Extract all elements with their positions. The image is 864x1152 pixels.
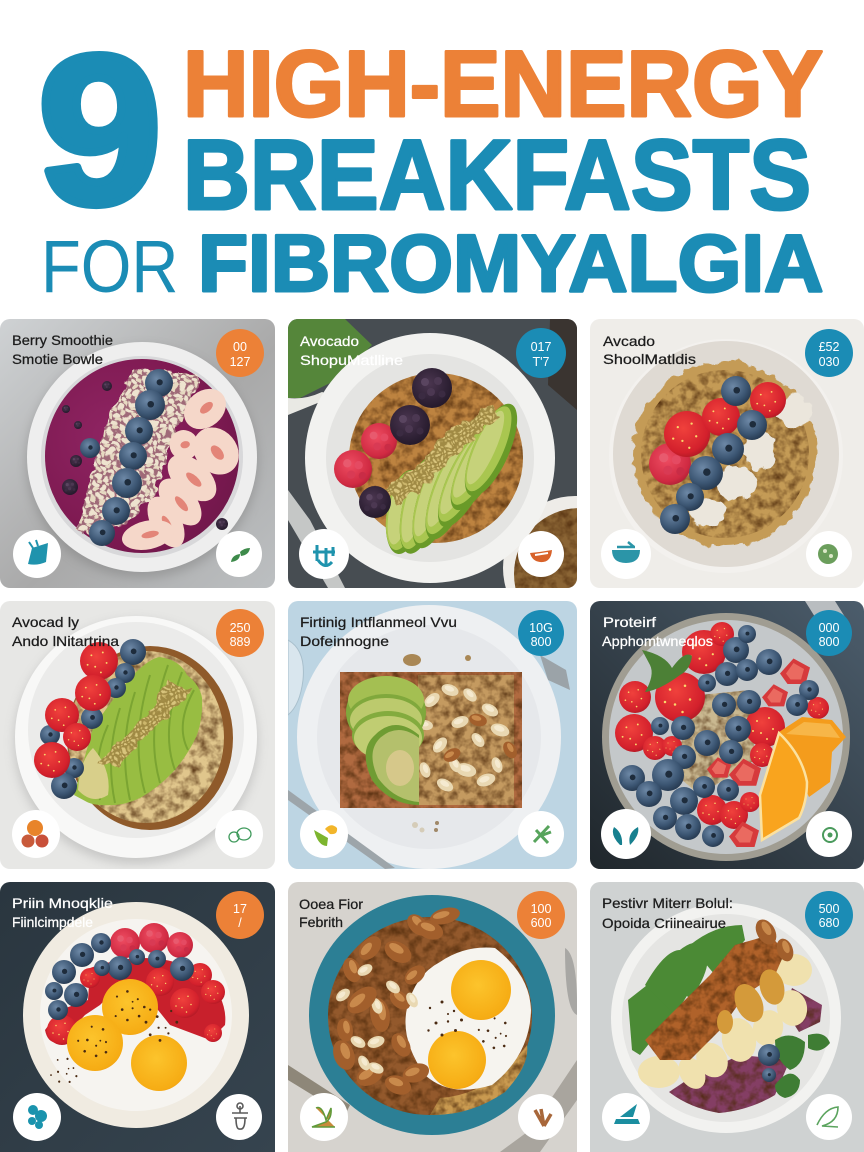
heading: ShopuMatlline [300,352,403,368]
badge: 680 [819,916,839,930]
badge: 10G [529,621,553,635]
badge: 030 [819,355,839,369]
icon: left [13,1093,61,1141]
badge: 000 [819,621,839,635]
panel: egg and berry bowl [0,882,275,1152]
badge: 800 [531,635,551,649]
heading: Berry Smoothie [12,332,113,348]
title line: breakfasts: BREAKFASTS [183,120,811,231]
badge: £52 [819,340,839,354]
icon: right [806,531,852,577]
icon: right [518,811,564,857]
badge: 889 [230,635,250,649]
icon: left [602,1093,650,1141]
panel: protein fruit bowl [590,601,864,869]
icon: right [806,1094,852,1140]
heading [12,616,120,646]
badge [806,610,852,656]
panel: avocado toast [288,319,577,588]
icon: right [215,810,263,858]
heading: Priin Mnoqklie [12,895,113,911]
panel: oatmeal berries [590,319,864,588]
heading: Febrith [299,914,343,930]
badge: 500 [819,902,839,916]
photo: fruit bowl [602,601,850,861]
number 9: 9 [38,12,162,249]
icon: right [518,531,564,577]
heading: Dofeinnogne [300,633,389,649]
badge [216,609,264,657]
badge: 250 [230,621,250,635]
badge: 17 [233,902,247,916]
icon: left [300,1093,348,1141]
heading: Avocad ly [12,614,79,630]
badge: 00 [233,340,247,354]
photo: nuts and eggs bowl [288,895,577,1152]
badge: 800 [819,635,839,649]
panel: pesto power bowl [590,882,864,1152]
badge [216,891,264,939]
heading: ShoolMatldis [603,351,696,367]
badge: 017 [531,340,551,354]
heading: Ooea Fior [299,896,363,912]
badge [805,891,853,939]
badge: 100 [531,902,551,916]
icon: left [12,810,60,858]
title [38,12,823,309]
panel: berry smoothie bowl [0,319,275,588]
heading [299,896,363,930]
heading [12,334,112,364]
title line: high-energy: HIGH-ENERGY [183,31,823,136]
panel: nuts and eggs bowl [288,882,577,1152]
badge: 600 [531,916,551,930]
photo: egg bowl [23,902,249,1128]
heading: Ando lNitartrina [12,633,119,649]
icon: right [518,1094,564,1140]
badge [517,891,565,939]
icon: right [216,531,262,577]
heading: Fiinlcimpdele [12,914,93,930]
nuts [329,905,462,1098]
icon: left [601,529,651,579]
badge: / [238,916,242,930]
heading: Avcado [603,333,655,349]
photo: avocado oat bowl [14,616,258,864]
icon: left [299,529,349,579]
heading: Pestivr Miterr Bolul: [602,895,733,911]
badge [516,328,566,378]
heading [602,336,696,364]
badge [216,329,264,377]
avocado fan [74,657,202,805]
icon: right [216,1094,262,1140]
icon: left [601,809,651,859]
photo: oatmeal bowl [609,339,843,573]
icon: right [806,811,852,857]
heading: Firtinig Intflanmeol Vvu [300,614,457,630]
photo: spinach granola bowl [611,903,841,1133]
icon: left [300,810,348,858]
badge [518,610,564,656]
badge [805,329,853,377]
heading [12,895,113,930]
title word: fibromyalgia: FIBROMYALGIA [198,218,823,309]
heading [300,333,403,368]
photo: toast plate [288,605,570,869]
photo: avocado toast plate [288,319,577,588]
photo: smoothie bowl [26,342,258,578]
panel: anti-inflammatory toast [288,601,577,869]
icon: left [13,530,61,578]
heading: Avocado [300,333,359,349]
heading: Opoida Criineairue [602,915,726,931]
heading [602,614,713,649]
heading: Smotie Bowle [12,351,103,367]
badge: T'7 [533,355,550,369]
heading: Proteirf [603,614,656,630]
badge: 127 [230,355,250,369]
title word: for: FOR [41,225,178,308]
heading: Apphomtwneqlos [602,633,713,649]
panel: avocado oat bowl [0,601,275,869]
heading [602,895,733,931]
heading [300,614,457,649]
